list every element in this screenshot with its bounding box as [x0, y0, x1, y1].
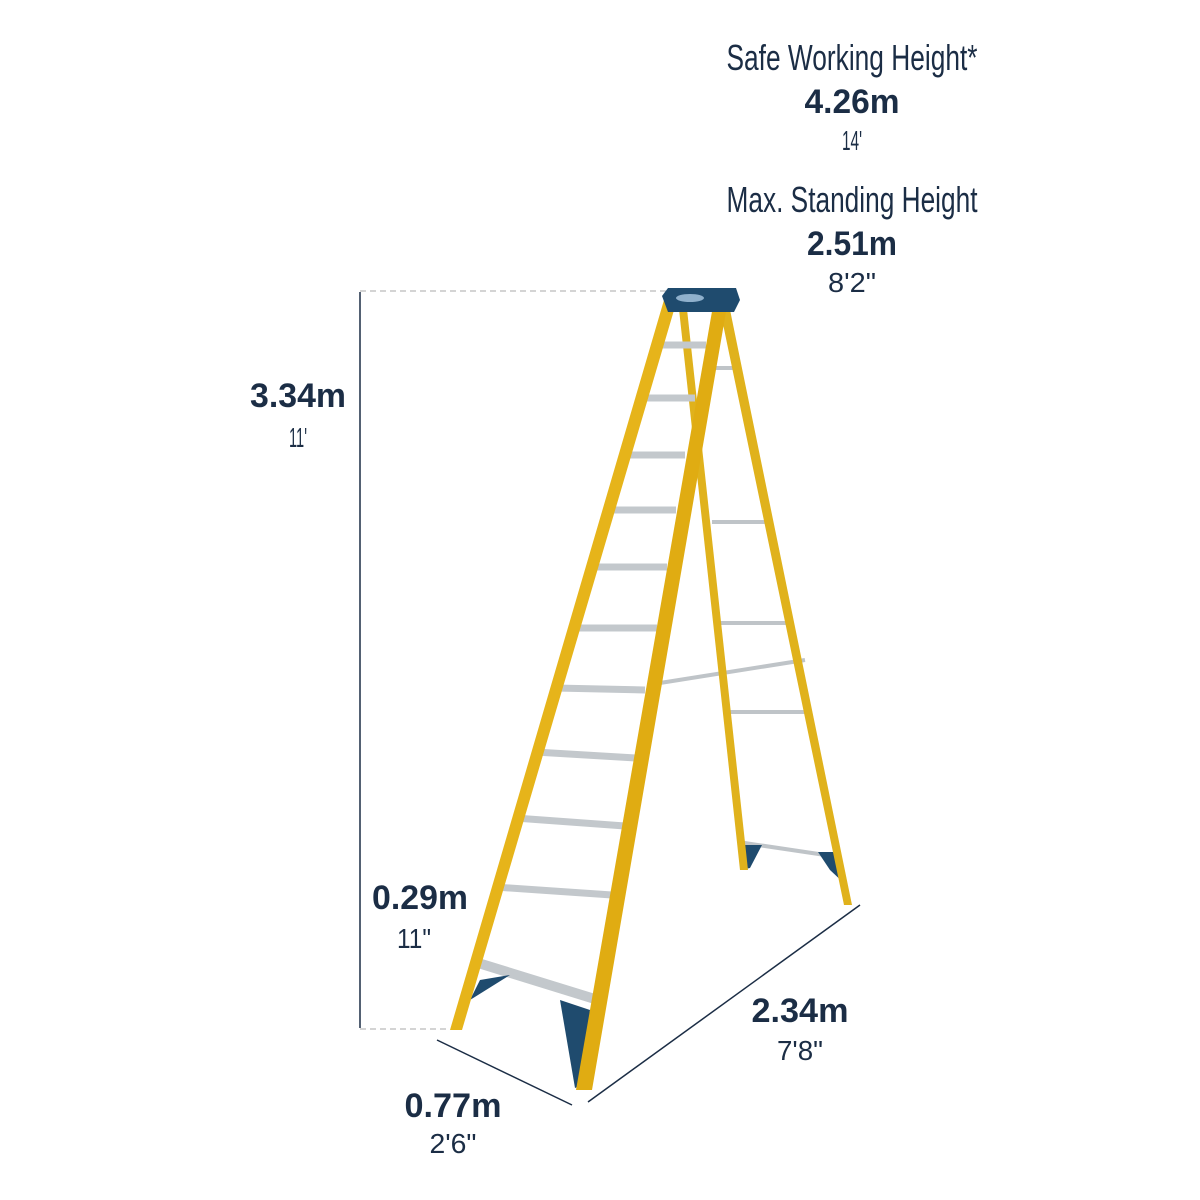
specs text block: 4.26m — [804, 83, 900, 121]
specs text block — [726, 37, 978, 298]
step spacing label: 11" — [397, 923, 431, 954]
height label: 3.34m — [250, 377, 346, 415]
height label: 11' — [289, 422, 307, 453]
front rails — [450, 300, 677, 1030]
width label: 2'6" — [430, 1128, 476, 1159]
step spacing label: 0.29m — [372, 879, 468, 917]
feet — [455, 975, 510, 1030]
specs text block: Max. Standing Height — [726, 179, 978, 220]
depth label — [752, 992, 848, 1066]
specs text block: Safe Working Height* — [726, 37, 978, 78]
rear ladder — [660, 300, 852, 905]
width label: 0.77m — [404, 1087, 502, 1125]
step spacing label — [372, 879, 468, 954]
specs text block: 2.51m — [807, 225, 897, 263]
top cap — [662, 288, 740, 312]
specs text block: 14' — [842, 125, 862, 156]
ladder — [450, 288, 852, 1090]
specs text block: 8'2" — [828, 267, 876, 298]
height label — [250, 377, 346, 453]
width dimension line — [437, 905, 860, 1105]
height dimension line — [360, 291, 712, 1029]
depth label: 7'8" — [777, 1035, 823, 1066]
front steps — [475, 345, 706, 1000]
width label — [404, 1087, 502, 1159]
depth label: 2.34m — [752, 992, 848, 1030]
